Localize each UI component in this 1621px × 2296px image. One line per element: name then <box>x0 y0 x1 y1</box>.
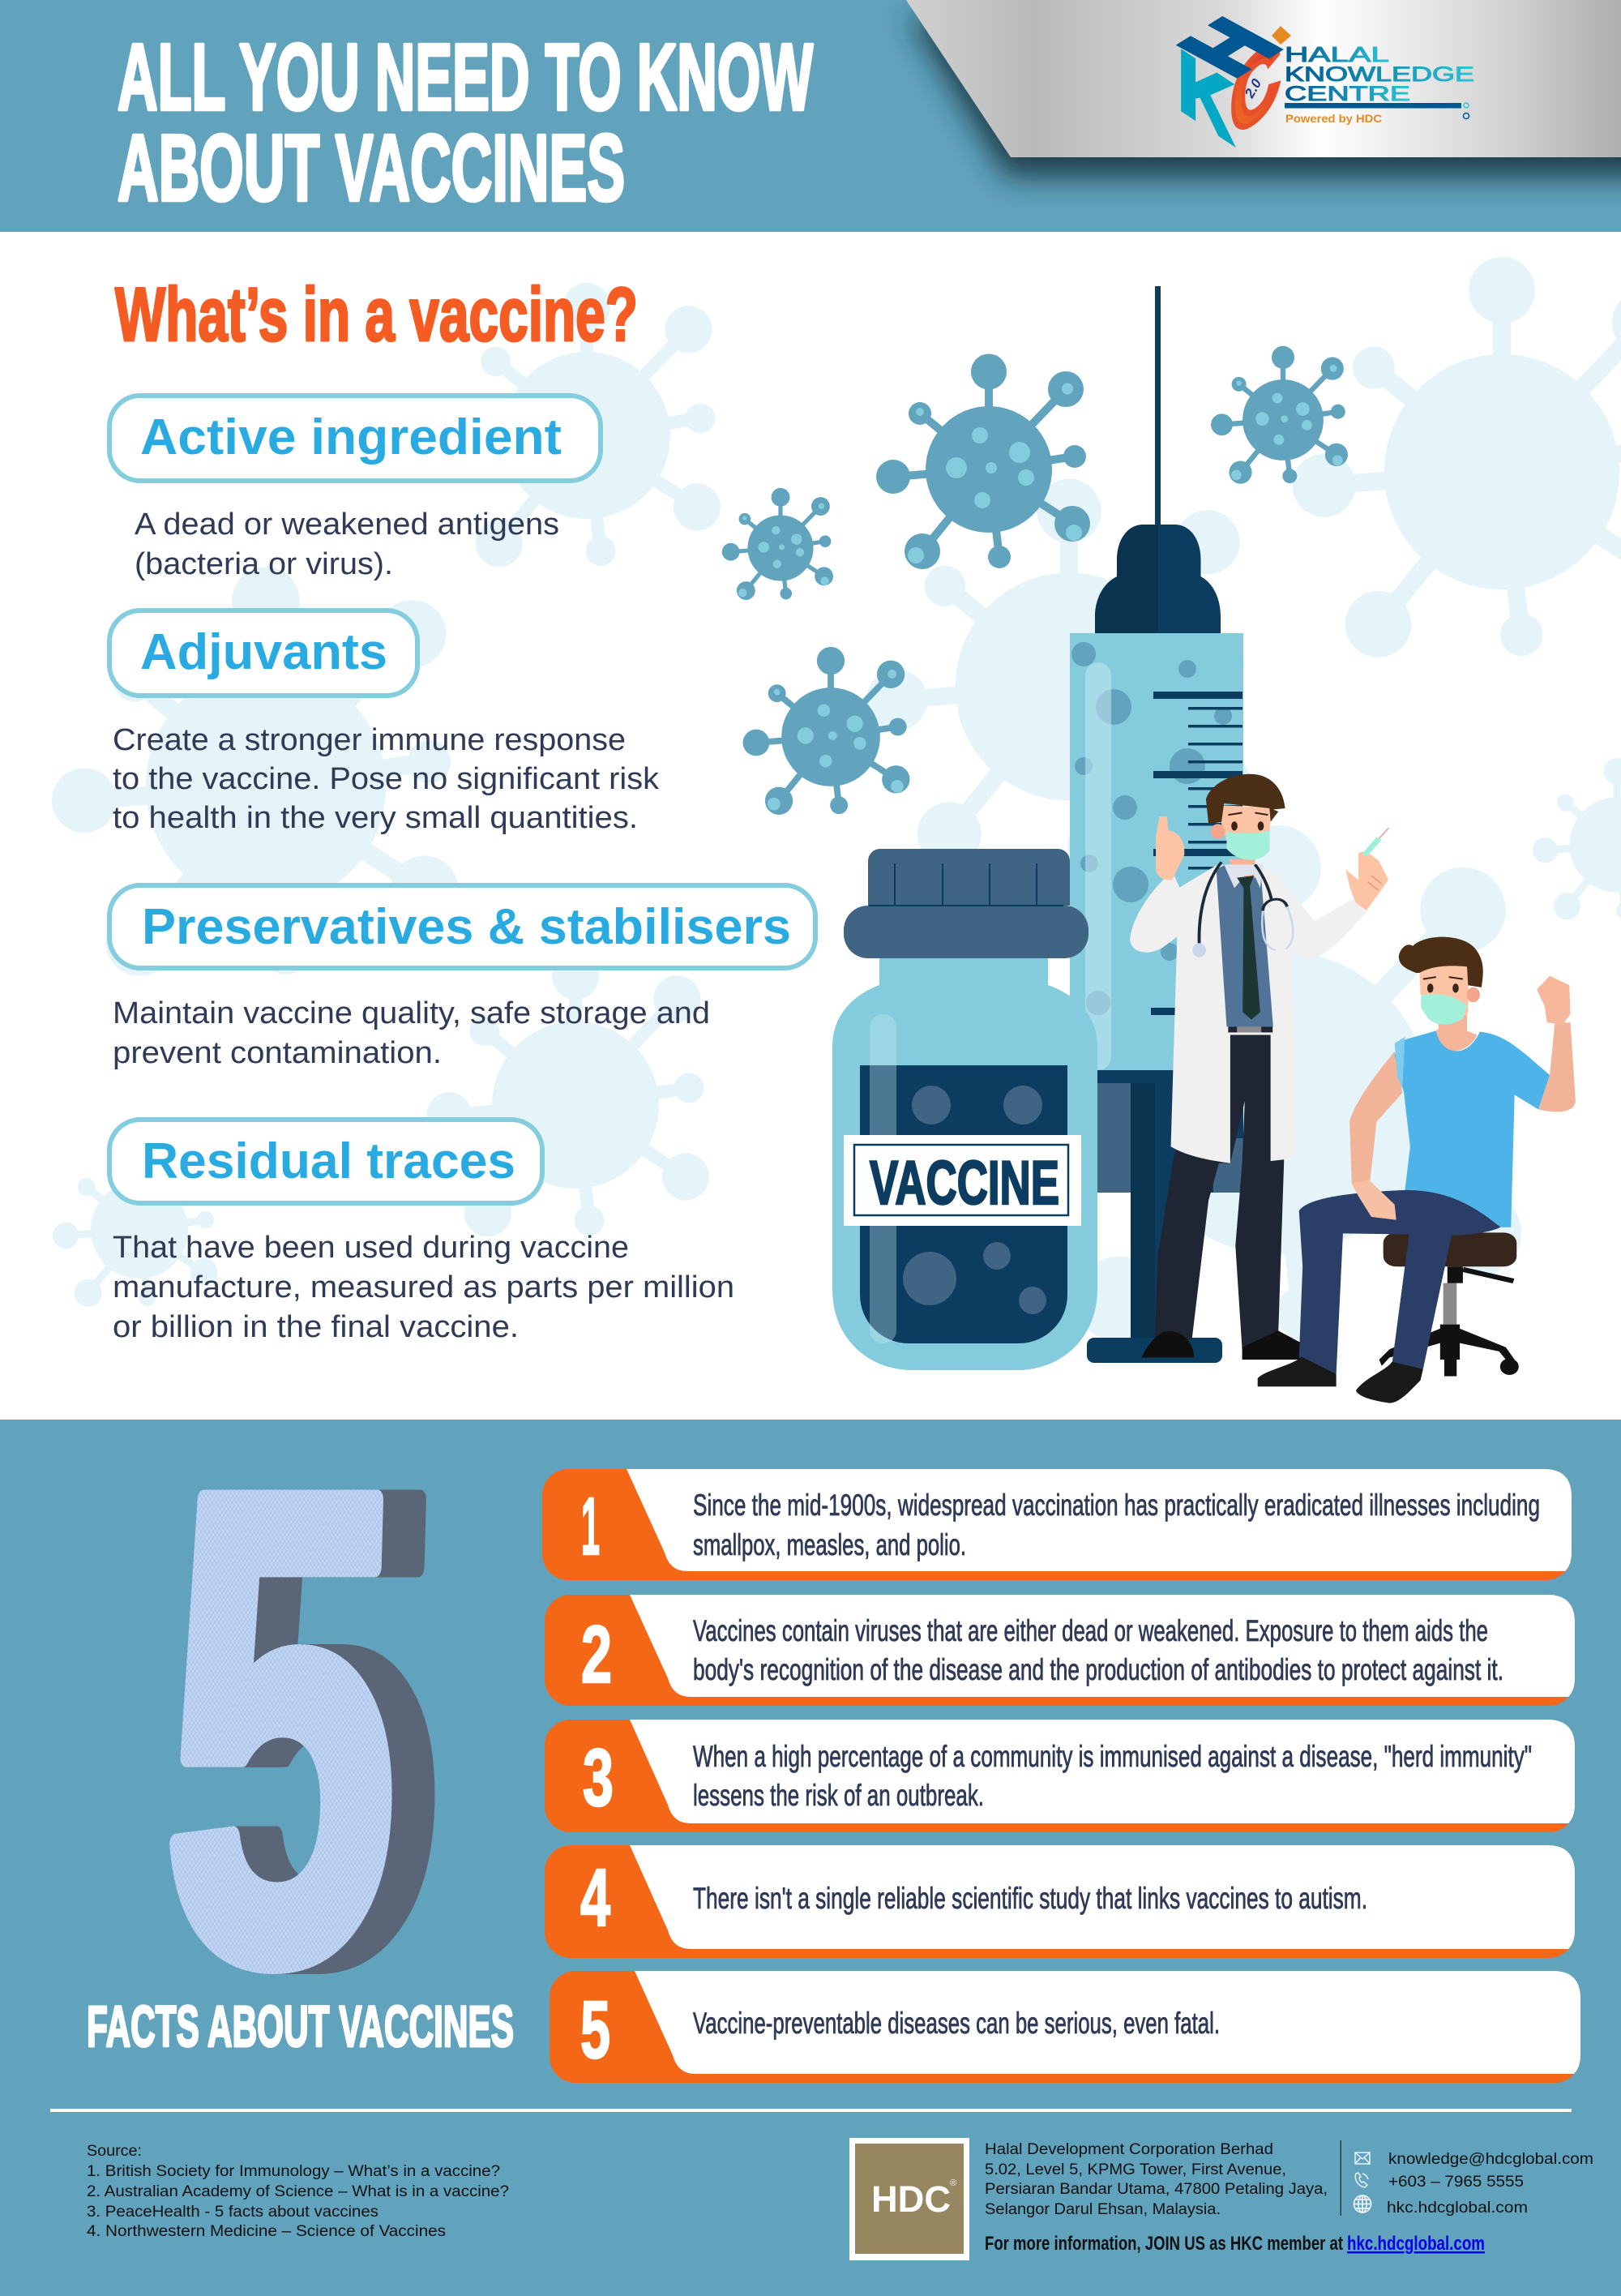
big number 5: 5 <box>177 1355 431 2100</box>
address block <box>985 2141 1328 2218</box>
big number 5: 5 <box>188 1355 442 2100</box>
logo: Halal Knowledge Centre <box>1159 6 1474 162</box>
contact details: hkc.hdcglobal.com <box>1387 2200 1528 2217</box>
background virus pattern <box>52 257 1621 1342</box>
illustration: doctor <box>1130 774 1388 1360</box>
big number 5: 5 <box>166 1355 421 2100</box>
address block: 5.02, Level 5, KPMG Tower, First Avenue, <box>985 2161 1286 2178</box>
title <box>118 24 813 221</box>
call to action: hkc.hdcglobal.com <box>1347 2233 1485 2255</box>
contact details <box>1354 2151 1593 2217</box>
panel: five facts band <box>0 1420 1621 2296</box>
fact card 1: smallpox, measles, and polio. <box>693 1528 966 1561</box>
big number 5: 5 <box>199 1355 452 2100</box>
illustration: syringe <box>1070 286 1243 1338</box>
fact card 4: There isn't a single reliable scientific study that links vaccines to autism. <box>693 1882 1367 1915</box>
source list: 4. Northwestern Medicine – Science of Vaccines <box>87 2223 446 2240</box>
icon: envelope <box>1355 2152 1370 2164</box>
fact card 5: Vaccine-preventable diseases can be serious, even fatal. <box>693 2007 1220 2040</box>
icon: globe <box>1354 2195 1371 2212</box>
panel: adjuvants: Adjuvants <box>140 624 387 680</box>
fact card 3: lessens the risk of an outbreak. <box>693 1779 984 1812</box>
logo: Halal Knowledge Centre: CENTRE <box>1285 83 1410 105</box>
logo: Halal Knowledge Centre: C <box>1230 15 1281 161</box>
address block: Selangor Darul Ehsan, Malaysia. <box>985 2201 1221 2218</box>
logo: HDC <box>849 2138 969 2260</box>
heading: what's in a vaccine: What’s in a vaccine? <box>115 272 638 357</box>
vaccine label: VACCINE <box>870 1149 1059 1218</box>
logo: Halal Knowledge Centre: H <box>1159 6 1302 88</box>
panel: preservatives and stabilisers <box>109 885 815 1070</box>
panel: residual traces: manufacture, measured as parts per million <box>113 1270 734 1304</box>
fact card 5 <box>550 1971 1580 2083</box>
source list <box>87 2143 509 2240</box>
big number 5: 5 <box>191 1355 446 2100</box>
vaccine label <box>844 1135 1081 1226</box>
icons: dark virus particles <box>722 346 1348 815</box>
panel: residual traces: That have been used during vaccine <box>113 1231 629 1265</box>
panel: residual traces: or billion in the final vaccine. <box>113 1310 519 1344</box>
source list: 2. Australian Academy of Science – What is in a vaccine? <box>87 2183 509 2200</box>
big number 5: 5 <box>195 1355 449 2100</box>
heading: facts about vaccines: FACTS ABOUT VACCINES <box>87 1995 514 2059</box>
panel: header band <box>0 0 1621 232</box>
contact details: +603 – 7965 5555 <box>1388 2174 1524 2191</box>
panel: active ingredient: (bacteria or virus). <box>135 547 393 581</box>
call to action: For more information, JOIN US as HKC member at <box>985 2233 1343 2255</box>
fact card 4 <box>545 1845 1575 1958</box>
panel: adjuvants: to health in the very small quantities. <box>113 801 638 835</box>
panel: residual traces: Residual traces <box>142 1133 515 1189</box>
source list: 1. British Society for Immunology – What’s in a vaccine? <box>87 2163 500 2180</box>
fact card 2: 2 <box>581 1609 612 1700</box>
logo: Halal Knowledge Centre: K <box>1178 31 1233 162</box>
address block: Halal Development Corporation Berhad <box>985 2141 1273 2158</box>
panel: preservatives and stabilisers: prevent contamination. <box>113 1036 442 1070</box>
logo: Halal Knowledge Centre: HALAL <box>1285 42 1389 66</box>
panel: preservatives and stabilisers: Preservatives & stabilisers <box>142 899 791 955</box>
fact card 2 <box>545 1595 1575 1706</box>
panel: adjuvants <box>109 610 660 835</box>
fact card 1: 1 <box>581 1481 600 1572</box>
fact card 5: 5 <box>580 1985 610 2075</box>
logo: Halal Knowledge Centre: 2.0 <box>1242 76 1265 101</box>
logo: Halal Knowledge Centre: Powered by HDC <box>1285 112 1382 125</box>
panel: adjuvants: Create a stronger immune response <box>113 723 626 757</box>
logo: Halal Knowledge Centre: KNOWLEDGE <box>1285 63 1474 86</box>
logo: HDC: HDC <box>871 2178 951 2220</box>
icon: phone <box>1355 2173 1368 2187</box>
panel: active ingredient: A dead or weakened antigens <box>135 508 559 542</box>
source list: 3. PeaceHealth - 5 facts about vaccines <box>87 2204 379 2221</box>
source list: Source: <box>87 2143 142 2160</box>
big number 5: 5 <box>170 1355 424 2100</box>
panel: residual traces <box>109 1120 734 1344</box>
fact card 4: 4 <box>580 1853 610 1943</box>
silver logo panel <box>906 0 1621 157</box>
fact card 3: 3 <box>583 1733 614 1823</box>
panel: preservatives and stabilisers: Maintain vaccine quality, safe storage and <box>113 996 710 1030</box>
panel: adjuvants: to the vaccine. Pose no significant risk <box>113 762 660 796</box>
big number 5: 5 <box>163 1355 417 2100</box>
panel: active ingredient <box>109 396 601 581</box>
illustration: patient on stool <box>1258 937 1576 1403</box>
fact card 1 <box>542 1469 1572 1580</box>
title: ABOUT VACCINES <box>118 115 625 221</box>
address block: Persiaran Bandar Utama, 47800 Petaling Jaya, <box>985 2181 1328 2198</box>
title: ALL YOU NEED TO KNOW <box>118 24 813 130</box>
logo: HDC: ® <box>950 2178 956 2188</box>
big number 5: 5 <box>156 1355 409 2100</box>
illustration: vaccine bottle <box>832 849 1222 1370</box>
big number 5: 5 <box>181 1355 434 2100</box>
big number 5: 5 <box>173 1355 428 2100</box>
fact card 3 <box>545 1720 1575 1832</box>
big number 5: 5 <box>184 1355 438 2100</box>
big number 5: 5 <box>160 1355 413 2100</box>
contact details: knowledge@hdcglobal.com <box>1388 2151 1593 2168</box>
panel: active ingredient: Active ingredient <box>140 409 562 465</box>
